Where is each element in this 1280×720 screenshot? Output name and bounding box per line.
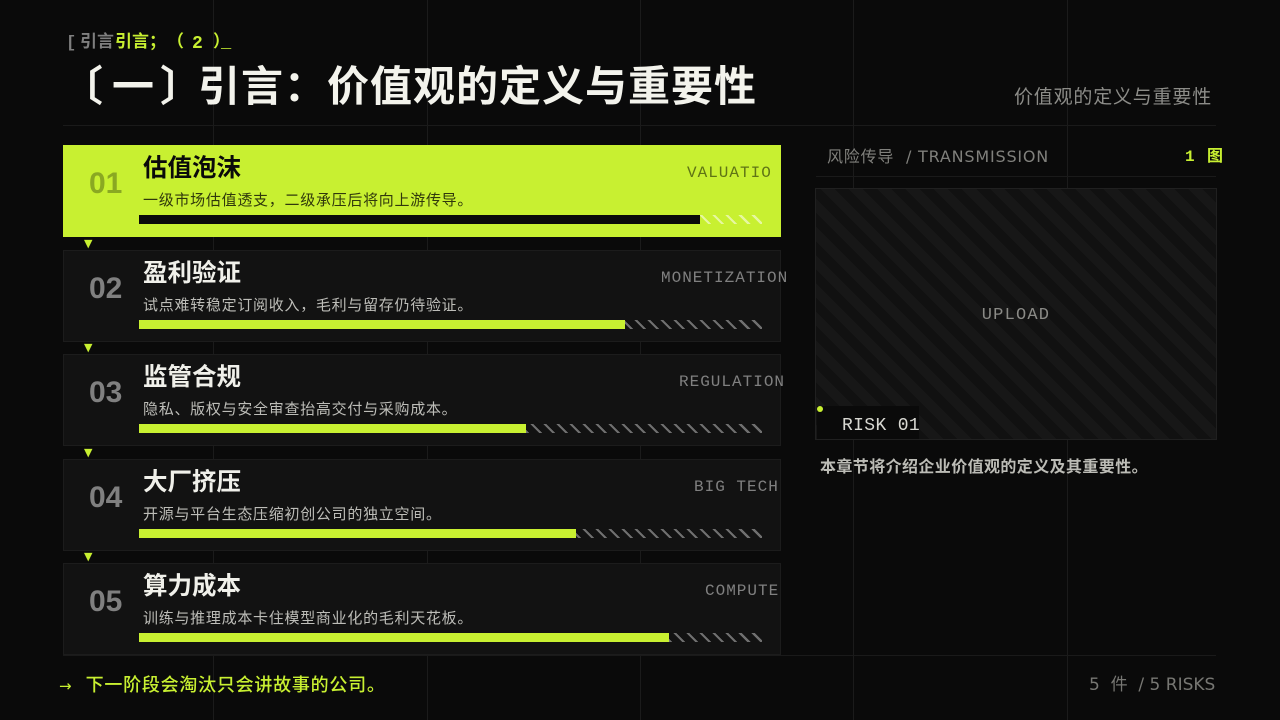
card 02: monetization: MONETIZATION	[661, 269, 788, 287]
section label: （	[167, 34, 184, 53]
section label: 2	[192, 34, 203, 54]
arrow: ▼	[84, 237, 92, 250]
panel heading: transmission: 风险传导 / TRANSMISSION	[827, 147, 1049, 166]
card 02: monetization: 盈利验证	[143, 260, 241, 287]
risk tag	[817, 406, 919, 439]
card 04: big tech	[63, 459, 781, 551]
upload label: UPLOAD	[982, 306, 1050, 325]
card 02: monetization: 试点难转稳定订阅收入，毛利与留存仍待验证。	[143, 297, 473, 314]
section label: _	[221, 34, 231, 53]
card 04: big tech: 04	[89, 480, 122, 514]
card 04: big tech: 开源与平台生态压缩初创公司的独立空间。	[143, 506, 442, 523]
title: 引言：价值观的定义与重要性	[198, 63, 757, 110]
card 05: compute	[63, 563, 781, 655]
arrow: ▼	[84, 446, 92, 459]
card 03: regulation: 隐私、版权与安全审查抬高交付与采购成本。	[143, 401, 457, 418]
card 03: regulation: 监管合规	[143, 364, 241, 391]
footer takeaway: → 下一阶段会淘汰只会讲故事的公司。	[59, 675, 386, 695]
marker dot	[817, 406, 823, 412]
card 04: big tech: 大厂挤压	[143, 469, 241, 496]
card 04: big tech: BIG TECH	[694, 478, 779, 496]
card 05: compute: COMPUTE	[705, 582, 779, 600]
title: 〔	[61, 63, 104, 110]
title: 一	[112, 63, 155, 110]
card 05: compute: 训练与推理成本卡住模型商业化的毛利天花板。	[143, 610, 473, 627]
arrow: ▼	[84, 341, 92, 354]
card 01: valuation: VALUATIO	[687, 164, 772, 182]
section label: [	[66, 34, 76, 53]
section label: 引言	[80, 34, 114, 53]
card 01: valuation	[63, 145, 781, 237]
card 02: monetization	[63, 250, 781, 342]
section label: ）	[213, 34, 230, 53]
caption: 本章节将介绍企业价值观的定义及其重要性。	[820, 459, 1148, 476]
figure count	[1185, 148, 1223, 166]
arrow: ▼	[84, 550, 92, 563]
figure count: 1	[1185, 148, 1195, 166]
card 01: valuation: 01	[89, 166, 122, 200]
card 02: monetization: 02	[89, 272, 122, 304]
title: 〕	[160, 63, 203, 110]
card 03: regulation: REGULATION	[679, 373, 785, 391]
risk tag: RISK 01	[842, 416, 920, 436]
card 03: regulation	[63, 354, 781, 446]
card 03: regulation: 03	[89, 376, 122, 408]
section label	[66, 32, 232, 54]
footer count: 5 件 / 5 RISKS	[1089, 675, 1215, 695]
section label: 引言；	[115, 34, 166, 53]
card 01: valuation: 一级市场估值透支，二级承压后将向上游传导。	[143, 192, 473, 209]
card 05: compute: 05	[89, 584, 122, 618]
figure count: 图	[1207, 148, 1223, 166]
image placeholder	[815, 188, 1217, 440]
subtitle: 价值观的定义与重要性	[1014, 87, 1212, 108]
card 05: compute: 算力成本	[143, 573, 241, 600]
card 01: valuation: 估值泡沫	[143, 155, 241, 182]
risk list	[63, 145, 788, 655]
